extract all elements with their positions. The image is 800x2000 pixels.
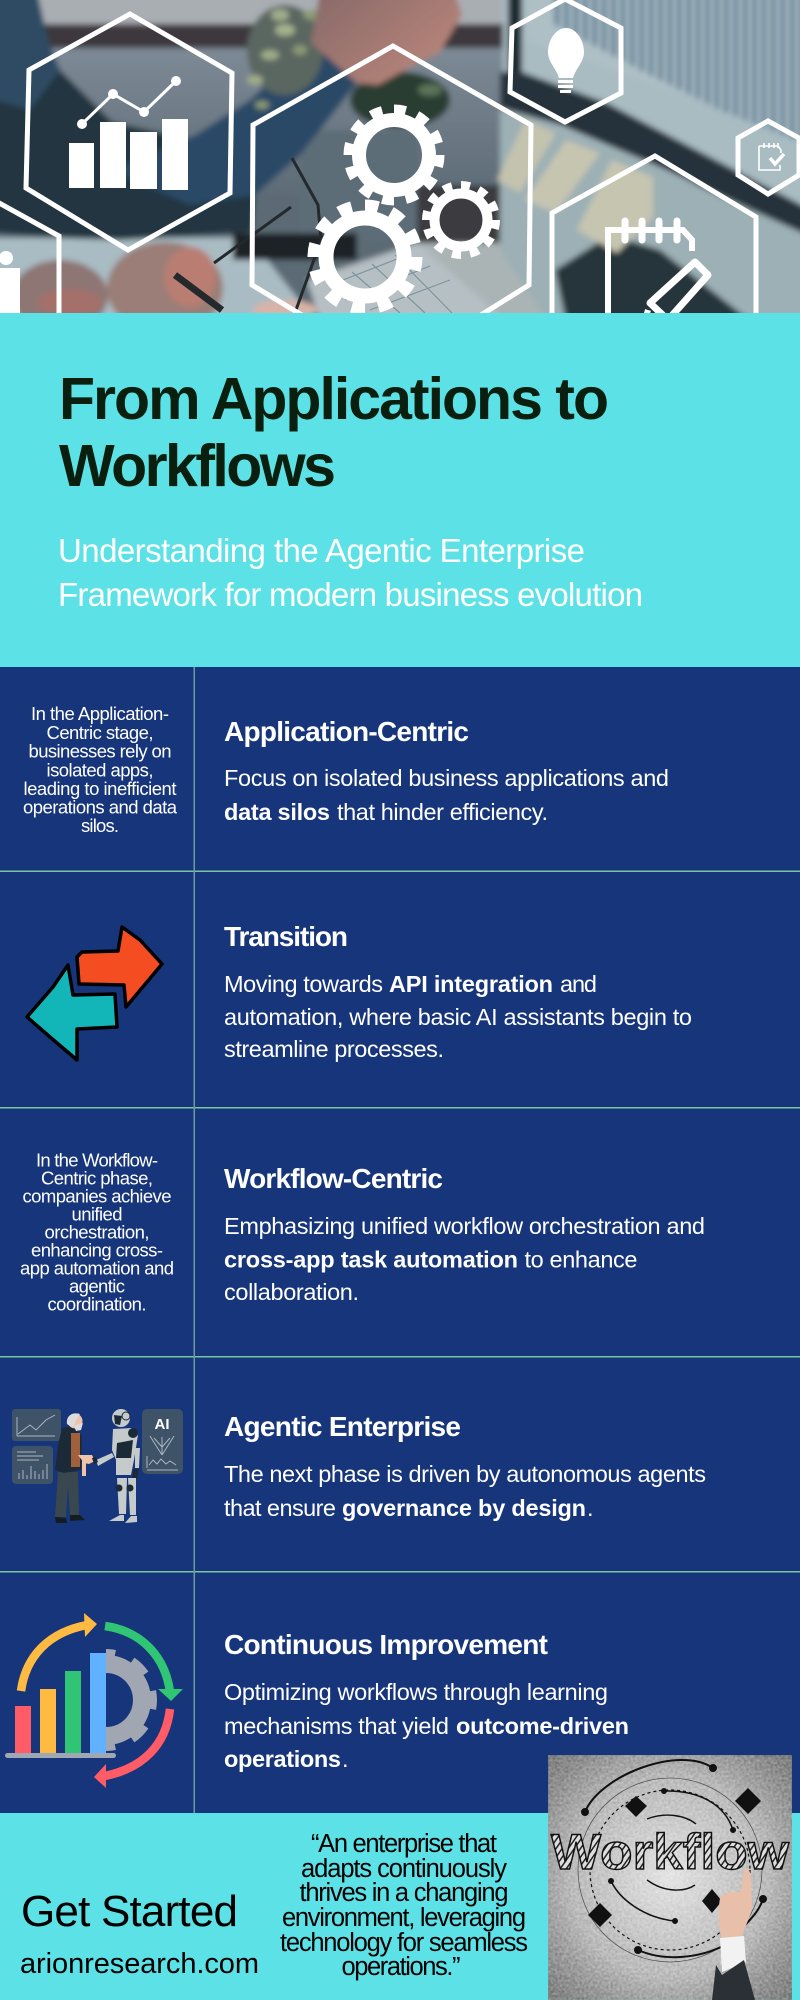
stage: Application-Centric [23, 703, 669, 836]
title: Workflows [59, 433, 336, 499]
heading: Workflow-Centric: Workflow-Centric [224, 1163, 443, 1194]
description: Agentic Enterprise: that ensure [224, 1495, 336, 1521]
side note: application-centric: leading to inefficient [24, 778, 176, 799]
heading: Agentic Enterprise: Agentic Enterprise [224, 1411, 461, 1442]
side note: application-centric: isolated apps, [46, 760, 154, 780]
icon: exchange arrows [27, 927, 162, 1060]
icon: clipboard check [759, 143, 784, 170]
quote: “An enterprise that [311, 1830, 497, 1858]
quote: environment, leveraging [282, 1904, 526, 1932]
orbit rings [578, 1760, 766, 1962]
stage: Agentic Enterprise [12, 1409, 706, 1523]
icon: gears [315, 111, 495, 307]
side note: workflow-centric: orchestration, [44, 1222, 150, 1242]
icon: improvement cycle chart [5, 1613, 183, 1788]
side note: workflow-centric: unified [72, 1204, 122, 1224]
description: Transition: and [560, 971, 597, 997]
description: Application-Centric: Focus on isolated business applications and [224, 765, 669, 791]
description: Transition: automation, where basic AI assistants begin to [224, 1004, 692, 1030]
description: Application-Centric: that hinder efficiency. [337, 799, 548, 825]
description: Continuous Improvement: . [342, 1746, 349, 1772]
side note: workflow-centric: Centric phase, [41, 1168, 153, 1188]
title panel [0, 313, 800, 667]
stage: Workflow-Centric [20, 1150, 705, 1314]
icon: notepad and pencil [608, 221, 708, 330]
side note: application-centric [23, 703, 178, 836]
website link: arionresearch.com [20, 1948, 259, 1980]
image word: Workflow: Workflow [551, 1824, 789, 1880]
hand and sleeve [712, 1868, 755, 2000]
side note: workflow-centric [20, 1150, 174, 1314]
hero photo banner [0, 0, 800, 313]
description: Continuous Improvement: mechanisms that yield [224, 1713, 449, 1739]
icon: light bulb [548, 28, 584, 93]
description: Transition: API integration [389, 971, 553, 997]
call to action: Get Started: Get Started [21, 1887, 238, 1936]
quote: thrives in a changing [300, 1879, 508, 1907]
quote [280, 1830, 528, 1981]
quote: operations.” [342, 1953, 460, 1981]
description: Continuous Improvement: outcome-driven [456, 1713, 629, 1739]
side note: application-centric: businesses rely on [28, 740, 172, 762]
quote: adapts continuously [301, 1855, 507, 1883]
subtitle: Understanding the Agentic Enterprise [58, 532, 585, 569]
description: Transition: streamline processes. [224, 1036, 444, 1062]
description: Transition: Moving towards [224, 971, 383, 997]
description: Workflow-Centric [224, 1213, 705, 1305]
keyboard keys [343, 254, 452, 313]
heading: Continuous Improvement: Continuous Improvement [224, 1629, 548, 1660]
side note: application-centric: silos. [81, 815, 119, 836]
subtitle [58, 532, 643, 613]
man [55, 1413, 95, 1523]
description: Continuous Improvement [224, 1679, 629, 1772]
icon: bar chart with trend line [69, 76, 188, 190]
stage: Transition [27, 921, 692, 1062]
side note: workflow-centric: companies achieve [22, 1186, 172, 1206]
description: Transition [224, 971, 692, 1062]
description: Workflow-Centric: to enhance [524, 1246, 638, 1272]
description: Workflow-Centric: collaboration. [224, 1279, 359, 1305]
side note: application-centric: operations and data [23, 796, 178, 818]
description: Agentic Enterprise: The next phase is driven by autonomous agents [224, 1461, 706, 1487]
workflow photo [548, 1755, 792, 2000]
side note: workflow-centric: app automation and [20, 1258, 174, 1278]
hexagon frames [0, 0, 800, 313]
heading: Application-Centric: Application-Centric [224, 716, 469, 747]
glasses [175, 158, 321, 310]
stages panel [0, 667, 800, 1813]
side note: workflow-centric: agentic [69, 1276, 125, 1296]
side note: workflow-centric: coordination. [48, 1294, 146, 1314]
icon: person [0, 251, 20, 318]
description: Agentic Enterprise: governance by design [342, 1495, 586, 1521]
description: Workflow-Centric: cross-app task automation [224, 1246, 518, 1272]
description: Application-Centric [224, 765, 669, 825]
side note: application-centric: Centric stage, [46, 722, 154, 743]
photo background: office desk [0, 0, 800, 313]
quote: technology for seamless [280, 1929, 528, 1957]
title [59, 366, 609, 499]
subtitle: Framework for modern business evolution [58, 576, 643, 613]
footer panel [0, 1813, 800, 2000]
data panels [12, 1409, 183, 1484]
illustration: human and robot handshake [12, 1409, 183, 1523]
stage: Continuous Improvement [5, 1613, 629, 1788]
description: Agentic Enterprise: . [587, 1495, 594, 1521]
title: From Applications to [59, 366, 609, 432]
description: Agentic Enterprise [224, 1461, 706, 1521]
description: Workflow-Centric: Emphasizing unified workflow orchestration and [224, 1213, 705, 1239]
diamonds [588, 1788, 761, 1927]
side note: application-centric: In the Application- [31, 703, 169, 724]
side note: workflow-centric: enhancing cross- [31, 1240, 163, 1260]
description: Continuous Improvement: Optimizing workflows through learning [224, 1679, 608, 1705]
side note: workflow-centric: In the Workflow- [36, 1150, 158, 1170]
robot [92, 1409, 140, 1523]
illustration: human and robot handshake: AI [154, 1416, 170, 1433]
heading: Transition: Transition [224, 921, 348, 952]
description: Continuous Improvement: operations [224, 1746, 341, 1772]
description: Application-Centric: data silos [224, 799, 330, 825]
